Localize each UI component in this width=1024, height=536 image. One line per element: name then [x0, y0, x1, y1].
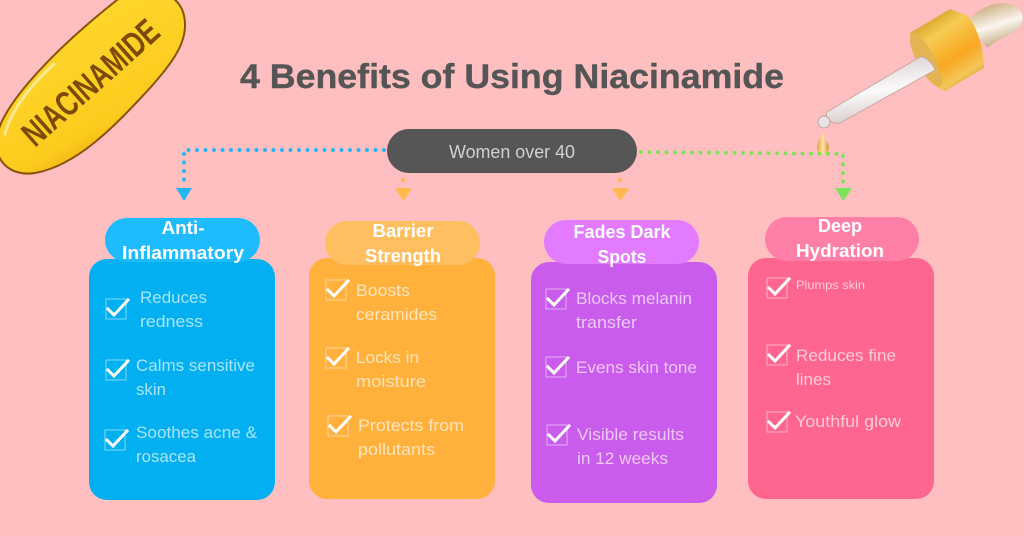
panel heading: Inflammatory: [122, 243, 244, 263]
item: evens skin tone: Evens skin tone: [576, 358, 697, 377]
item: visible results: Visible results: [577, 425, 684, 444]
panel heading: [544, 220, 699, 267]
item: plumps skin: Plumps skin: [796, 278, 865, 292]
item: reduces redness: [106, 288, 207, 331]
item: reduces redness: redness: [140, 312, 203, 331]
panel body: [531, 262, 717, 503]
item: youthful glow: Youthful glow: [795, 412, 902, 431]
item: reduces fine lines: lines: [796, 370, 831, 389]
arrow: to anti-inflammatory: [176, 150, 384, 201]
item: reduces redness: Reduces: [140, 288, 207, 307]
item: soothes acne and rosacea: [105, 423, 258, 466]
item: visible results: in 12 weeks: [577, 449, 668, 468]
item: protects from pollutants: pollutants: [358, 440, 435, 459]
panel: anti-inflammatory: [89, 218, 275, 500]
panel heading: [325, 221, 480, 266]
dropper bulb: [967, 3, 1023, 48]
panel heading: Strength: [365, 246, 441, 266]
item: calms sensitive skin: skin: [136, 380, 166, 399]
panel body: [748, 258, 934, 499]
panel heading: Spots: [598, 247, 646, 267]
item: boosts ceramides: [326, 280, 437, 324]
panel heading: Barrier: [372, 221, 434, 241]
item: locks in moisture: Locks in: [356, 348, 419, 367]
item: reduces fine lines: Reduces fine: [796, 346, 896, 365]
item: blocks melanin transfer: [546, 289, 692, 332]
dropper tip: [818, 116, 830, 128]
dropper collar: [910, 9, 984, 91]
dropper tube: [826, 57, 935, 123]
item: blocks melanin transfer: transfer: [576, 313, 637, 332]
panel: fades dark spots: [531, 220, 717, 503]
item: soothes acne and rosacea: rosacea: [136, 447, 197, 466]
item: boosts ceramides: ceramides: [356, 305, 437, 324]
panel: deep hydration: [748, 216, 934, 499]
icon: dropper: [817, 3, 1023, 154]
item: visible results: [547, 425, 684, 468]
panel heading: Deep: [818, 216, 862, 236]
item: locks in moisture: [326, 348, 426, 391]
panel heading: Fades Dark: [574, 222, 671, 242]
item: locks in moisture: moisture: [356, 372, 426, 391]
panel heading: Hydration: [796, 241, 884, 261]
panel body: [89, 259, 275, 500]
collar opening: [904, 29, 948, 91]
item: calms sensitive skin: [106, 356, 255, 399]
item: protects from pollutants: [328, 416, 464, 459]
icon: niacinamide capsule: [0, 0, 185, 174]
arrow: to fades dark spots: [612, 178, 629, 201]
panel heading: [105, 218, 260, 263]
item: blocks melanin transfer: Blocks melanin: [576, 289, 692, 308]
arrow: to barrier strength: [395, 178, 412, 201]
panel heading: Anti-: [162, 218, 205, 238]
item: protects from pollutants: Protects from: [358, 416, 464, 435]
item: plumps skin: [767, 278, 865, 298]
panel heading: [765, 216, 919, 261]
item: reduces fine lines: [767, 345, 896, 389]
drop: [817, 131, 829, 154]
panel body: [309, 258, 495, 499]
panel: barrier strength: [309, 221, 495, 499]
audience pill: [387, 129, 637, 173]
item: soothes acne and rosacea: Soothes acne &: [136, 423, 258, 442]
title: 4 Benefits of Using Niacinamide: [240, 58, 784, 96]
audience label: Women over 40: [449, 142, 575, 162]
item: calms sensitive skin: Calms sensitive: [136, 356, 255, 375]
item: boosts ceramides: Boosts: [356, 281, 410, 300]
arrow: to deep hydration: [641, 152, 852, 201]
